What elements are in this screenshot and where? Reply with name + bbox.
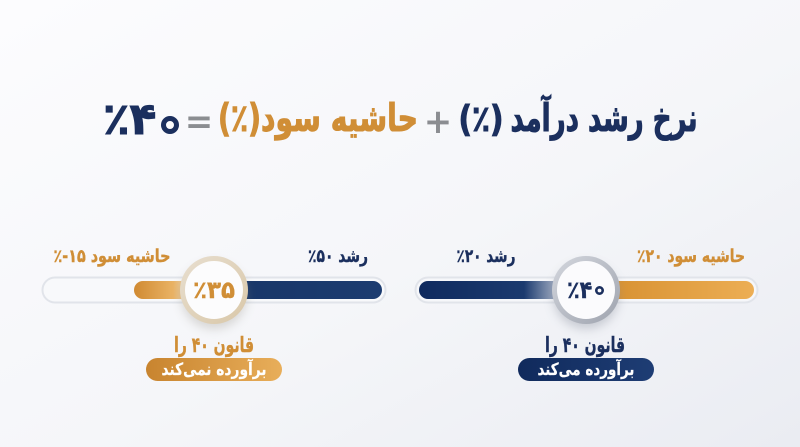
label: profit margin minus 15 percent: حاشیه سود ۱۵-٪ bbox=[53, 246, 170, 267]
title: 40 percent rule formula bbox=[103, 94, 698, 145]
dial: 35 percent: ٪۳۵ bbox=[193, 276, 235, 304]
gold margin bar bbox=[600, 281, 754, 299]
dial: 40 percent bbox=[552, 256, 620, 329]
gold margin bar bbox=[134, 281, 194, 299]
navy growth bar bbox=[419, 281, 569, 299]
title part: 40 percent: ٪۴۰ bbox=[103, 94, 183, 145]
badge: does not meet: برآورده نمی‌کند bbox=[162, 358, 266, 380]
title part: percent in parentheses: (٪) bbox=[458, 99, 504, 140]
panel: slider that meets the rule bbox=[416, 246, 758, 381]
dial: 40 percent: ٪۴۰ bbox=[567, 276, 605, 304]
badge: meets: برآورده می‌کند bbox=[538, 358, 634, 380]
panel: slider that does not meet the rule bbox=[42, 246, 386, 381]
title part: ring zero overlay bbox=[164, 118, 176, 132]
caption: the 40 rule: قانون ۴۰ را bbox=[545, 333, 625, 357]
title part: plus sign: + bbox=[424, 102, 452, 142]
dial: 35 percent bbox=[180, 256, 248, 329]
label: growth 20 percent: رشد ۲۰٪ bbox=[457, 246, 516, 267]
slider track bbox=[416, 278, 758, 302]
title part: profit margin: حاشیه سود(٪) bbox=[218, 96, 418, 140]
title part: revenue growth rate: نرخ رشد درآمد bbox=[510, 94, 698, 140]
caption: the 40 rule: قانون ۴۰ را bbox=[174, 333, 254, 357]
slider track bbox=[42, 278, 386, 302]
title part: equals sign: = bbox=[185, 102, 213, 142]
label: growth 50 percent: رشد ۵۰٪ bbox=[308, 246, 368, 267]
navy growth bar bbox=[230, 281, 382, 299]
label: profit margin 20 percent: حاشیه سود ۲۰٪ bbox=[637, 246, 745, 267]
